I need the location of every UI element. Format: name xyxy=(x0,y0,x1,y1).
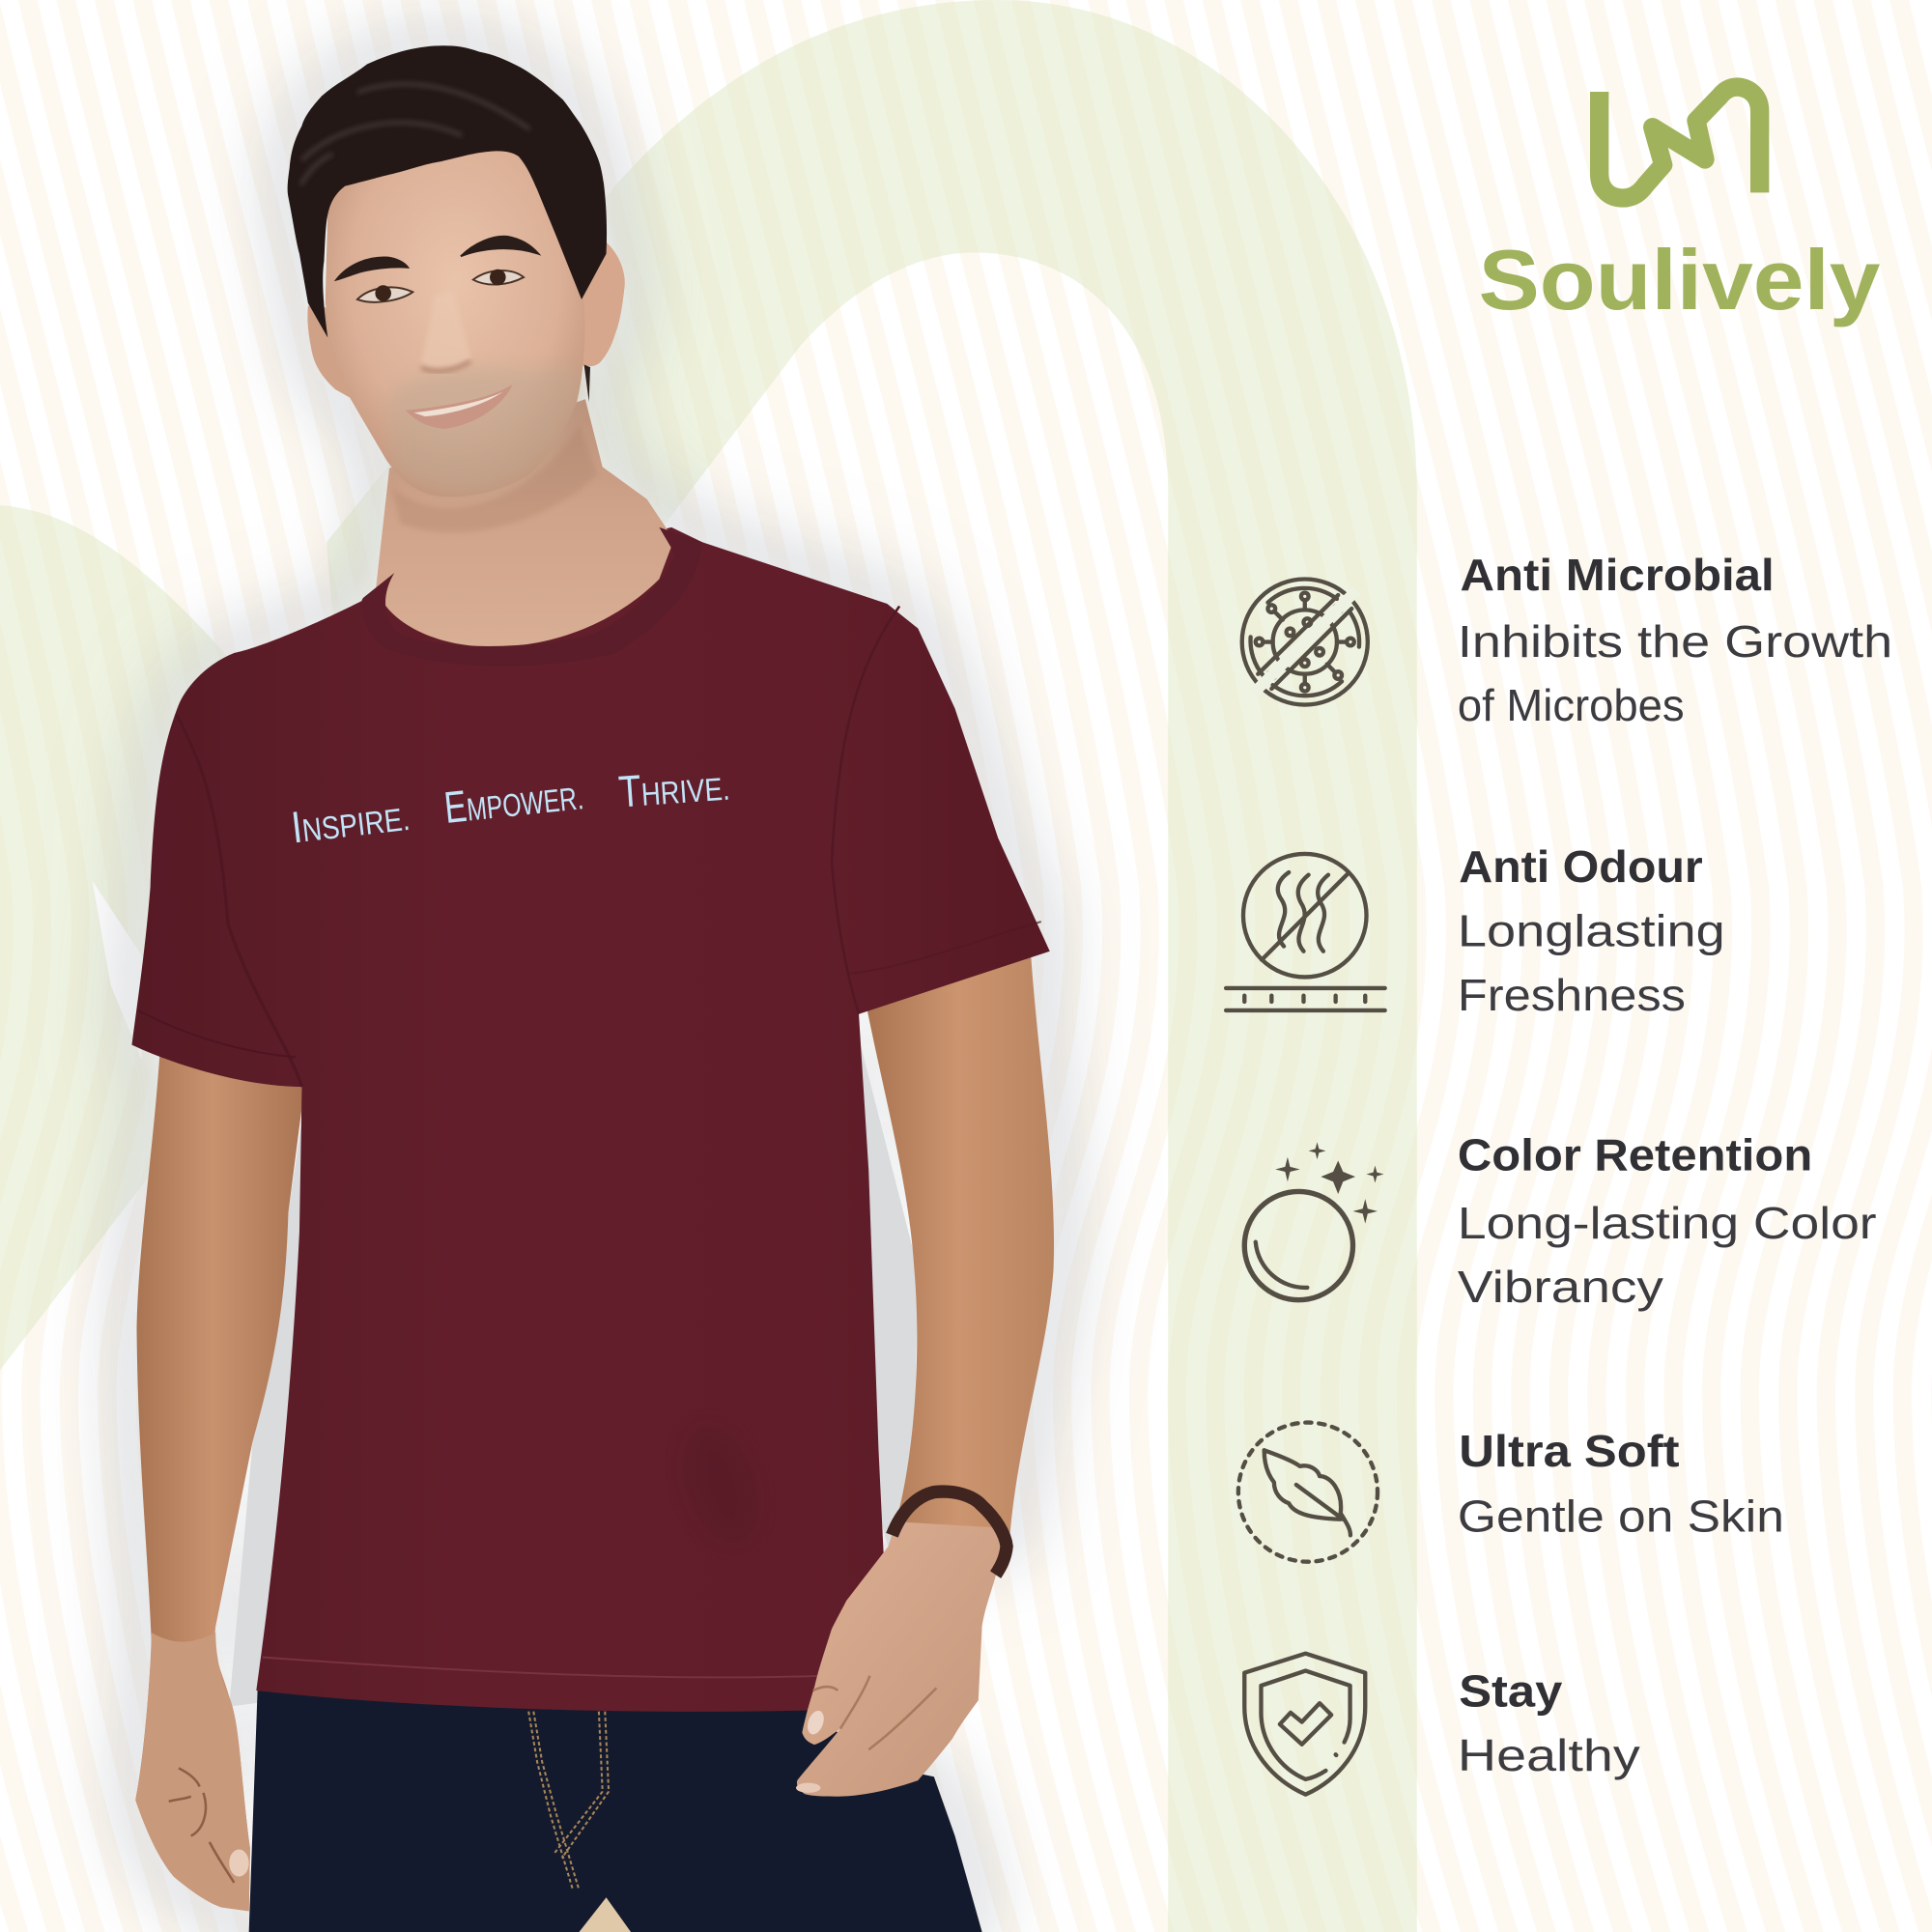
neck xyxy=(376,399,674,647)
eyes xyxy=(357,270,524,302)
description line 2: of Microbes xyxy=(1458,680,1685,730)
logo mark xyxy=(1600,87,1760,198)
mouth xyxy=(406,384,513,429)
description line 2: Vibrancy xyxy=(1458,1262,1663,1312)
description: Long-lasting Color xyxy=(1458,1198,1877,1248)
right ear xyxy=(569,241,625,366)
right hand with bracelet xyxy=(796,1492,1007,1797)
green left wave xyxy=(0,505,296,1370)
moustache and beard stubble xyxy=(389,367,582,493)
right arm xyxy=(863,943,1054,1547)
shirt slogan: EMPOWER. xyxy=(441,768,585,833)
description line 2: Freshness xyxy=(1458,970,1686,1020)
facial features xyxy=(336,237,538,429)
white notch xyxy=(93,881,146,1060)
shirt slogan: INSPIRE. xyxy=(289,789,412,852)
hand xyxy=(797,1521,1002,1797)
left ear xyxy=(307,305,355,401)
description: Longlasting xyxy=(1458,906,1725,956)
brand name: Soulively xyxy=(1479,232,1880,327)
collar xyxy=(361,527,702,667)
nose xyxy=(421,290,470,371)
description: Inhibits the Growth xyxy=(1458,616,1892,667)
model wearing maroon t-shirt xyxy=(131,45,1054,1932)
description: Gentle on Skin xyxy=(1458,1491,1784,1541)
feature: color retention xyxy=(1244,1130,1877,1312)
hair xyxy=(288,45,607,337)
icon: virus crossed out xyxy=(1242,579,1368,705)
icon: feather in dashed circle xyxy=(1238,1423,1378,1562)
heading: Color Retention xyxy=(1458,1130,1812,1180)
stray hair by ear xyxy=(584,365,590,402)
grey shadow between torso and arms xyxy=(229,1005,918,1707)
jaw shadow on neck xyxy=(392,425,598,532)
description: Healthy xyxy=(1458,1730,1640,1780)
heading: Stay xyxy=(1459,1666,1563,1717)
feature: ultra soft xyxy=(1238,1423,1784,1562)
feature: anti odour xyxy=(1226,841,1725,1020)
face xyxy=(326,135,584,497)
feature: anti microbial xyxy=(1242,550,1892,730)
shirt slogan: THRIVE. xyxy=(617,759,731,816)
shirt slogan xyxy=(289,759,731,852)
feature: stay healthy xyxy=(1244,1654,1640,1795)
t-shirt xyxy=(131,527,1050,1712)
green arch band xyxy=(327,0,1417,1932)
jeans xyxy=(249,1690,982,1932)
left arm and hand xyxy=(135,1047,308,1911)
icon: shield with check xyxy=(1244,1654,1365,1795)
icon: odour waves crossed over fabric xyxy=(1226,854,1385,1010)
heading: Anti Microbial xyxy=(1460,550,1775,600)
finger creases and nails xyxy=(796,1676,936,1793)
bracelet xyxy=(892,1492,1007,1575)
icon: shining sphere with sparkles xyxy=(1244,1142,1383,1300)
heading: Ultra Soft xyxy=(1459,1426,1680,1476)
heading: Anti Odour xyxy=(1459,841,1703,892)
eyebrows xyxy=(336,237,538,280)
